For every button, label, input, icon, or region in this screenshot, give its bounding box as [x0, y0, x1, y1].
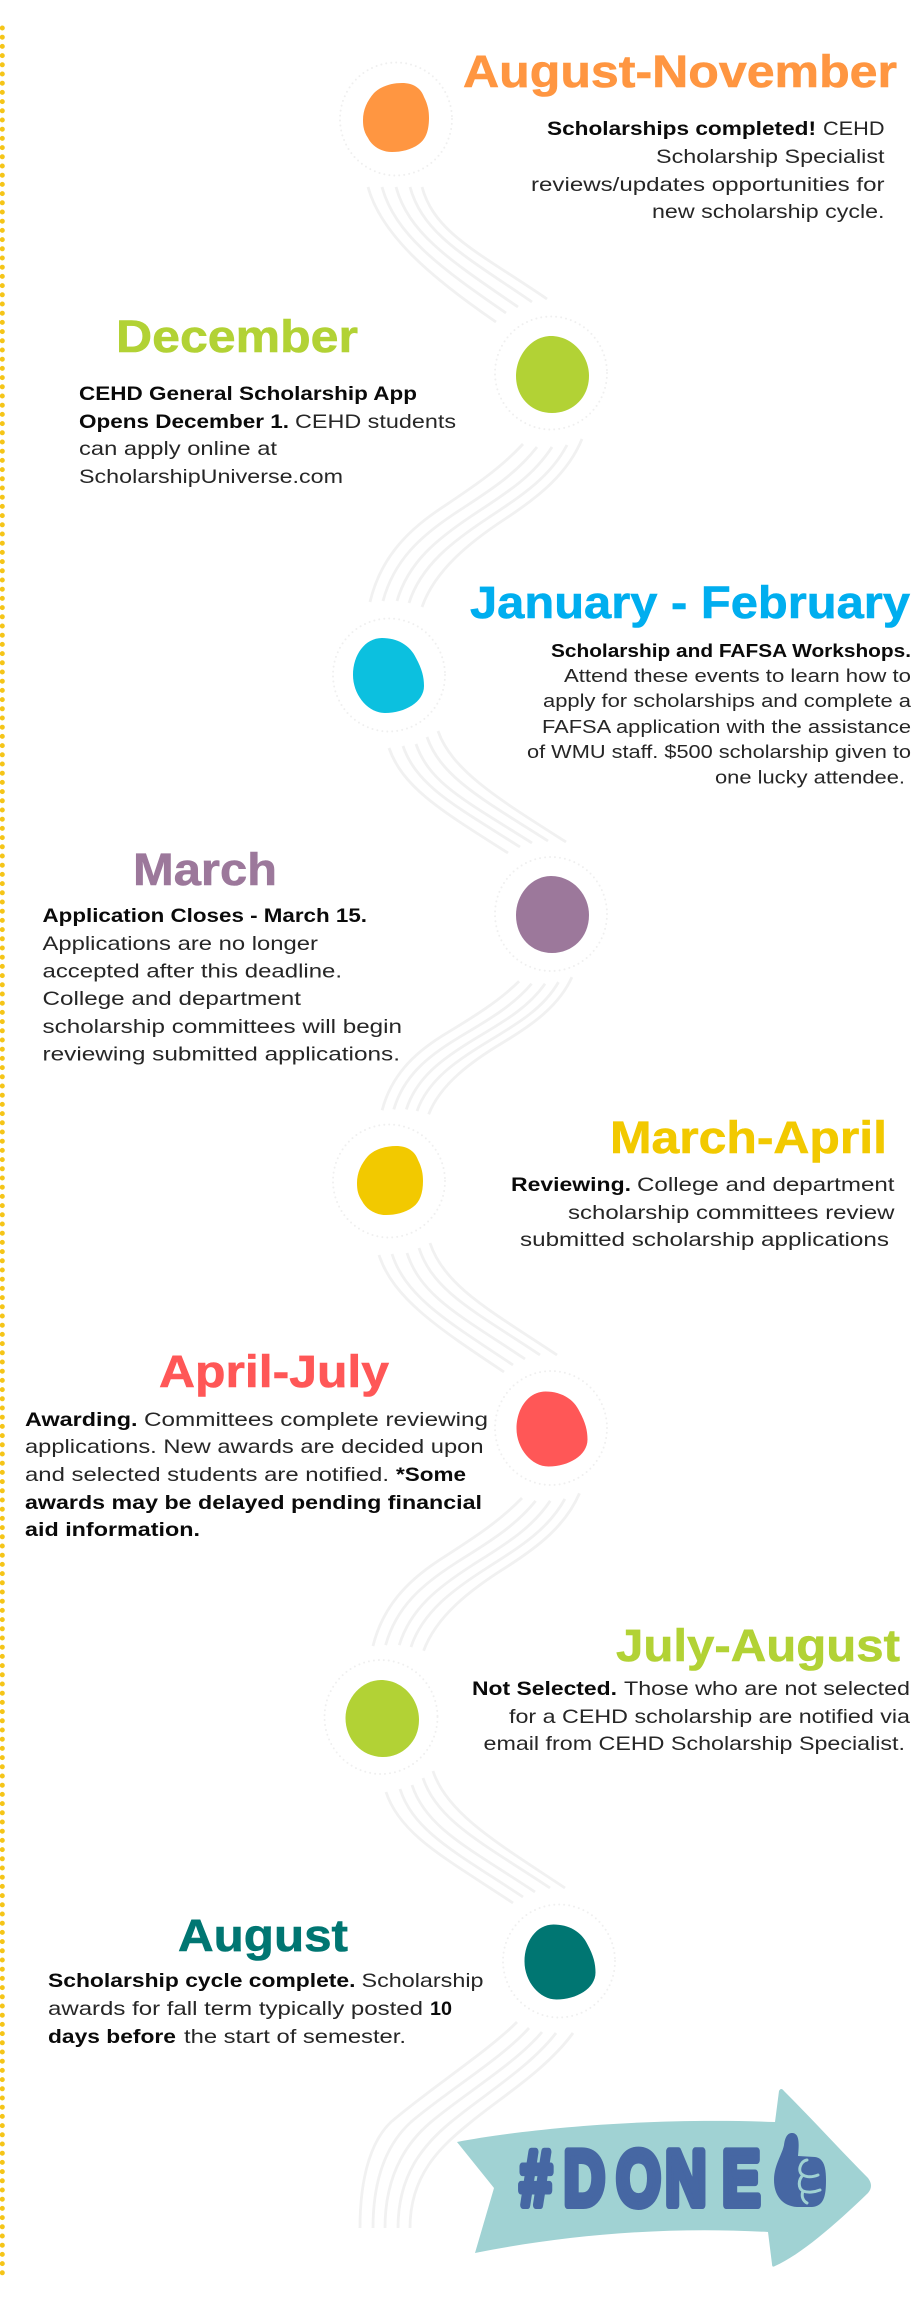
- text block: August-November description: Scholarship Specialist: [656, 146, 885, 168]
- text block: March-April description: [511, 1174, 896, 1251]
- section: December: [79, 311, 456, 488]
- text block: August description: Scholarship cycle complete.: [48, 1970, 356, 1992]
- left dotted border: [0, 28, 5, 2275]
- text block: August description: 10: [430, 1998, 452, 2020]
- text block: August-November description: reviews/updates opportunities for: [531, 174, 885, 196]
- icon: thumbs up: [774, 2133, 826, 2207]
- heading: March: March: [133, 844, 277, 895]
- text block: March description: [42, 905, 402, 1066]
- section: April-July: [25, 1346, 488, 1541]
- connector: March to March-April: [382, 977, 572, 1114]
- heading: August: August: [178, 1910, 348, 1961]
- text block: March-April description: College and department: [637, 1174, 895, 1196]
- arrow: #DONE banner: [457, 2089, 871, 2267]
- text block: March description: accepted after this deadline.: [42, 960, 342, 982]
- text block: April-July description: Awarding.: [25, 1409, 138, 1431]
- text block: August description: [48, 1970, 484, 2048]
- text block: March description: College and department: [42, 988, 302, 1010]
- heading: December: December: [116, 311, 358, 362]
- text block: July-August description: Not Selected.: [472, 1678, 617, 1700]
- text block: January-February description: of WMU staff. $500 scholarship given to: [527, 741, 911, 762]
- text block: August description: Scholarship: [362, 1970, 484, 1992]
- text block: January-February description: one lucky attendee.: [715, 766, 905, 788]
- section: March: [42, 844, 402, 1066]
- text block: August description: days before: [48, 2026, 176, 2048]
- connector: December to January-February: [370, 439, 582, 607]
- text block: April-July description: aid information.: [25, 1519, 200, 1541]
- node: August-November marker: [340, 62, 452, 176]
- text block: August description: the start of semester.: [184, 2026, 406, 2048]
- connector: August to done arrow: [360, 2022, 573, 2228]
- text block: December description: CEHD General Scholarship App: [79, 383, 417, 405]
- text block: March-April description: Reviewing.: [511, 1174, 631, 1196]
- text block: December description: can apply online at: [79, 438, 278, 460]
- text block: July-August description: [472, 1678, 910, 1755]
- text block: April-July description: Committees complete reviewing: [144, 1409, 488, 1431]
- text block: August-November description: CEHD: [823, 118, 884, 140]
- connector: July-August to August: [386, 1771, 565, 1903]
- connector: March-April to April-July: [379, 1243, 557, 1372]
- node: August marker: [503, 1904, 615, 2018]
- heading: March-April: March-April: [610, 1112, 887, 1163]
- heading: April-July: April-July: [159, 1346, 390, 1397]
- heading: January - February: January - February: [470, 577, 911, 628]
- node: April-July marker: [495, 1371, 607, 1485]
- connector: January-February to March: [389, 731, 566, 853]
- heading: August-November: August-November: [463, 46, 897, 97]
- text block: July-August description: email from CEHD Scholarship Specialist.: [484, 1733, 905, 1755]
- node: January-February marker: [333, 618, 445, 732]
- text block: March description: Applications are no longer: [42, 933, 319, 955]
- node: July-August marker: [324, 1660, 438, 1774]
- section: August-November: [463, 46, 897, 223]
- text block: July-August description: for a CEHD scholarship are notified via: [509, 1706, 910, 1728]
- text block: April-July description: [25, 1409, 488, 1541]
- text block: December description: ScholarshipUniverse.com: [79, 466, 343, 488]
- connector: August-November to December: [368, 187, 547, 322]
- text block: August description: awards for fall term typically posted: [48, 1998, 423, 2020]
- text block: July-August description: Those who are not selected: [624, 1678, 910, 1700]
- text block: December description: Opens December 1.: [79, 411, 289, 433]
- text block: August-November description: [531, 118, 885, 223]
- heading: July-August: July-August: [616, 1620, 900, 1671]
- text block: March-April description: submitted scholarship applications: [520, 1229, 889, 1251]
- text block: January-February description: [527, 640, 912, 788]
- node: March marker: [495, 857, 607, 971]
- text block: March description: reviewing submitted applications.: [42, 1044, 400, 1066]
- text block: August-November description: new scholarship cycle.: [652, 201, 884, 223]
- section: August: [48, 1910, 484, 2048]
- text block: January-February description: Scholarship and FAFSA Workshops.: [551, 640, 911, 661]
- text block: January-February description: Attend these events to learn how to: [564, 665, 911, 686]
- node: March-April marker: [333, 1124, 445, 1238]
- node: December marker: [495, 316, 607, 430]
- section: March-April: [511, 1112, 896, 1251]
- section: January-February: [470, 577, 912, 788]
- text block: April-July description: and selected students are notified.: [25, 1464, 389, 1486]
- label: #DONE: #DONE: [520, 2135, 760, 2222]
- text block: March description: Application Closes - March 15.: [42, 905, 367, 927]
- text block: April-July description: awards may be delayed pending financial: [25, 1492, 482, 1514]
- text block: August-November description: Scholarships completed!: [547, 118, 816, 140]
- connector: April-July to July-August: [373, 1493, 579, 1651]
- text block: January-February description: apply for scholarships and complete a: [543, 690, 912, 711]
- text block: April-July description: applications. New awards are decided upon: [25, 1436, 484, 1458]
- section: July-August: [472, 1620, 910, 1755]
- text block: March description: scholarship committees will begin: [42, 1016, 402, 1038]
- text block: April-July description: *Some: [396, 1464, 466, 1486]
- text block: December description: CEHD students: [295, 411, 456, 433]
- text block: December description: [79, 383, 456, 488]
- text block: March-April description: scholarship committees review: [568, 1202, 896, 1224]
- text block: January-February description: FAFSA application with the assistance: [542, 716, 911, 737]
